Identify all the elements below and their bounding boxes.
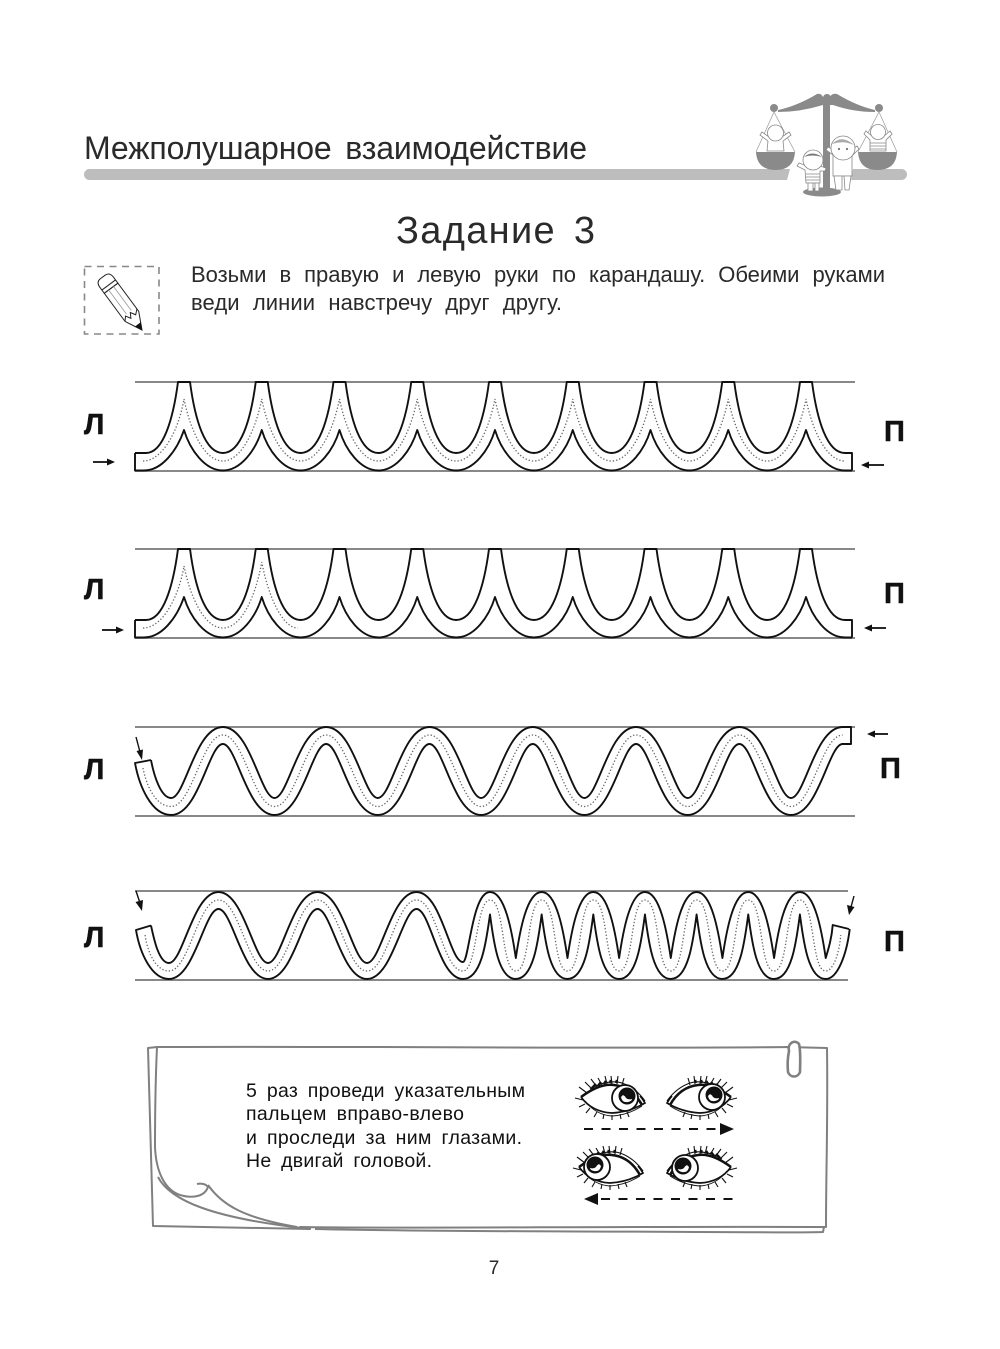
arrow: dashed left — [584, 1193, 734, 1205]
upper edge row 3 — [151, 727, 851, 798]
illustration: scales with children — [756, 94, 897, 196]
tracing row 1: scallops fully dotted — [135, 382, 855, 471]
label and arrow: row 4 right — [847, 896, 905, 958]
note text — [246, 1080, 525, 1172]
page number: 7 — [489, 1258, 499, 1279]
lower edge row 2 — [135, 597, 852, 638]
label and arrow: row 2 right: П — [884, 578, 905, 610]
lower edge row 3 — [135, 744, 843, 815]
label and arrow: row 2 left: Л — [84, 574, 104, 606]
instruction text — [191, 262, 885, 315]
note text: 5 раз проведи указательным — [246, 1080, 525, 1102]
lower edge row 4 — [136, 909, 850, 979]
label and arrow: row 1 left — [84, 409, 115, 466]
label and arrow: row 3 left: Л — [84, 754, 104, 786]
tracing row 2: scallops partly dotted — [135, 549, 855, 638]
icon: paper clip — [788, 1042, 800, 1076]
callout: paper note with eye exercise — [148, 1042, 827, 1232]
tracing row 3: even waves — [135, 727, 855, 816]
note text: и проследи за ним глазами. — [246, 1127, 522, 1149]
label and arrow: row 3 right — [867, 730, 901, 785]
icon: pencil in dashed box — [84, 266, 159, 335]
label and arrow: row 3 right: П — [880, 753, 901, 785]
upper edge row 4 — [151, 892, 849, 963]
upper edge row 1 — [135, 382, 852, 470]
task heading: Задание 3 — [396, 210, 595, 252]
dotted guide row 4 — [145, 900, 841, 971]
upper edge row 2 — [135, 549, 852, 638]
instruction text: веди линии навстречу друг другу. — [191, 290, 562, 315]
dotted guide row 3 — [143, 735, 843, 806]
section title: Межполушарное взаимодействие — [84, 130, 587, 166]
label and arrow: row 2 left — [84, 574, 124, 634]
dotted guide row 2 — [143, 562, 298, 628]
label and arrow: row 1 left: Л — [84, 409, 104, 441]
instruction text: Возьми в правую и левую руки по карандашу. Обеими руками — [191, 262, 885, 287]
arrow: dashed right — [584, 1123, 734, 1135]
dotted guide row 1 — [143, 399, 845, 461]
grey header bar — [84, 169, 907, 180]
icon: eyes looking left — [573, 1146, 737, 1190]
lower edge row 1 — [135, 430, 852, 470]
header: section title with bar and scales — [84, 94, 907, 196]
icon: eyes looking right — [575, 1076, 737, 1120]
label and arrow: row 3 left — [84, 737, 143, 786]
paper sheet — [148, 1047, 827, 1232]
tracing row 4: wide then narrow waves — [135, 891, 850, 980]
label and arrow: row 2 right — [864, 578, 905, 632]
label and arrow: row 1 right — [861, 416, 905, 468]
label and arrow: row 4 right: П — [884, 926, 905, 958]
label and arrow: row 1 right: П — [884, 416, 905, 448]
label and arrow: row 4 left — [84, 891, 143, 954]
note text: пальцем вправо-влево — [246, 1103, 464, 1125]
label and arrow: row 4 left: Л — [84, 922, 104, 954]
note text: Не двигай головой. — [246, 1150, 432, 1172]
